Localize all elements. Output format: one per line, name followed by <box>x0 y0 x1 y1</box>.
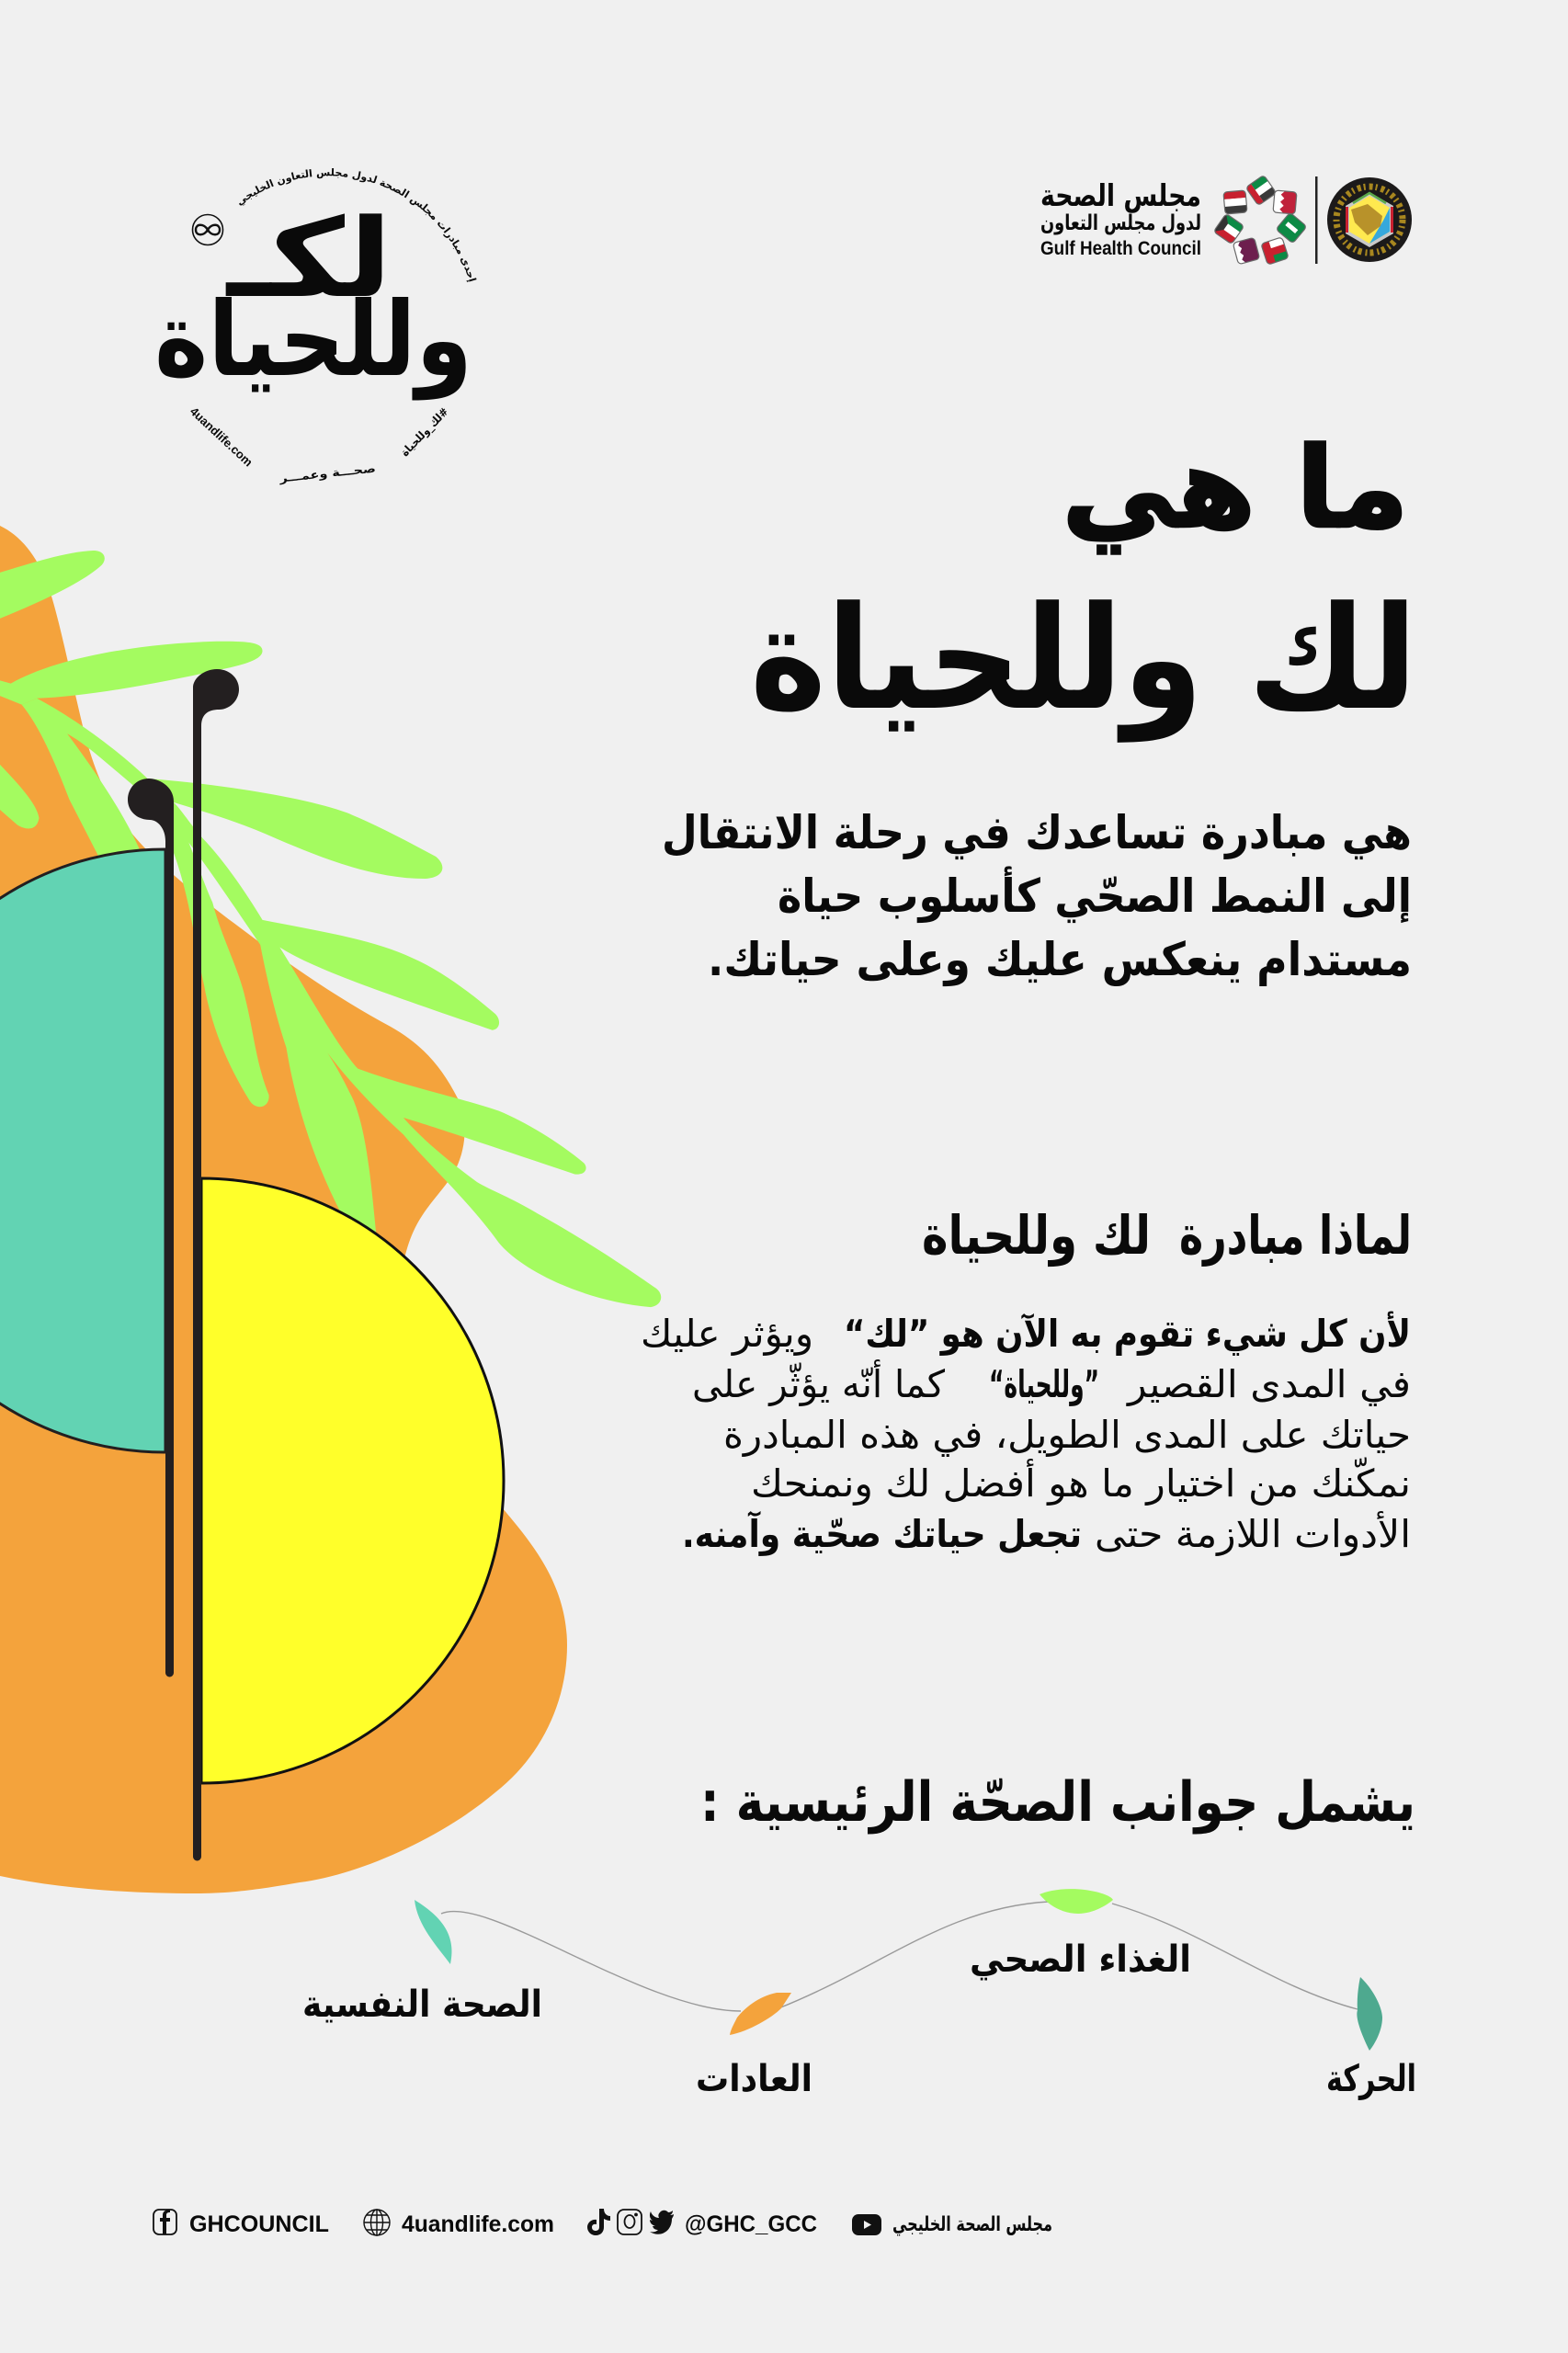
intro paragraph: مستدام ينعكس عليك وعلى حياتك. <box>708 933 1412 987</box>
why paragraph: في المدى القصير <box>1126 1362 1411 1407</box>
illustration: plant, blobs and half circles <box>0 526 661 1893</box>
infinity badge <box>193 215 222 244</box>
logo word: lak: لكـ <box>225 195 392 322</box>
tall stem with head <box>193 669 239 1860</box>
icon: twitter <box>650 2211 674 2234</box>
hashtag: #لك_وللحياة <box>398 405 451 460</box>
why paragraph: ”وللحياة“ <box>989 1362 1099 1407</box>
label: ghcouncil: GHCOUNCIL <box>189 2211 329 2237</box>
intro paragraph: هي مبادرة تساعدك في رحلة الانتقال <box>662 806 1412 859</box>
why paragraph: كما أنّه يؤثّر على <box>692 1359 945 1406</box>
icon: globe <box>364 2210 390 2235</box>
flags ring <box>1213 175 1307 265</box>
connecting curve <box>441 1902 1358 2011</box>
campaign logo: circular badge <box>154 168 476 486</box>
title line one: ما هي <box>1062 423 1409 554</box>
why heading: لماذا مبادرة <box>1179 1204 1412 1267</box>
council name: مجلس الصحة <box>1040 177 1201 213</box>
circular caption: إحدى مبادرات مجلس الصحة لدول مجلس التعاون الخليجي <box>239 168 476 283</box>
why paragraph: الأدوات اللازمة حتى <box>1095 1510 1411 1556</box>
why paragraph <box>641 1310 1411 1557</box>
council name: Gulf Health Council <box>1040 238 1201 259</box>
aspect: healthy food <box>970 1889 1191 1981</box>
why heading <box>922 1204 1412 1267</box>
aspect: movement <box>1326 1977 1416 2100</box>
intro paragraph: إلى النمط الصحّي كأسلوب حياة <box>778 866 1412 924</box>
label: website: 4uandlife.com <box>402 2211 554 2237</box>
url: 4uandlife.com <box>187 404 256 469</box>
intro paragraph <box>662 806 1412 987</box>
GCC emblem <box>1327 177 1412 262</box>
aspect: habits <box>696 1993 812 2100</box>
title line two: campaign name: لك وللحياة <box>750 575 1417 744</box>
aspects heading: يشمل جوانب الصحّة الرئيسية : <box>700 1770 1415 1835</box>
plant leaves <box>0 551 661 1307</box>
why paragraph: لأن كل شيء تقوم به الآن هو ”لك“ <box>844 1310 1411 1357</box>
icon: facebook <box>153 2210 176 2234</box>
tagline: صحـــة وعمـــر <box>278 462 377 486</box>
short stem with head <box>128 779 174 1677</box>
council name <box>1040 177 1201 259</box>
icon: instagram <box>618 2210 642 2234</box>
yellow half circle <box>201 1178 504 1783</box>
aspect: movement: الحركة <box>1326 2058 1416 2100</box>
label: youtube channel: مجلس الصحة الخليجي <box>892 2213 1052 2236</box>
icon: tiktok <box>587 2209 610 2235</box>
health aspects path <box>302 1889 1416 2100</box>
aspect: mental health <box>302 1900 542 2026</box>
divider line <box>1315 176 1318 264</box>
why paragraph: حياتك على المدى الطويل، في هذه المبادرة <box>723 1413 1411 1458</box>
logo word: walilhayah: وللحياة <box>154 280 472 401</box>
icon: youtube <box>852 2214 881 2235</box>
why heading: لك وللحياة <box>922 1204 1151 1267</box>
why paragraph: نمكّنك من اختيار ما هو أفضل لك ونمنحك <box>751 1457 1411 1506</box>
aspect: habits: العادات <box>696 2058 812 2100</box>
aspect: mental health: الصحة النفسية <box>302 1984 542 2026</box>
teal half circle <box>0 849 165 1452</box>
why paragraph: ويؤثر عليك <box>641 1312 813 1356</box>
aspect: healthy food: الغذاء الصحي <box>970 1938 1191 1981</box>
council logo <box>1040 175 1412 265</box>
main title <box>750 423 1417 744</box>
footer social links <box>153 2209 1052 2237</box>
orange blob <box>0 526 567 1893</box>
label: handle: @GHC_GCC <box>685 2211 817 2237</box>
council name: لدول مجلس التعاون <box>1040 211 1201 235</box>
why paragraph: تجعل حياتك صحّية وآمنه. <box>682 1511 1082 1557</box>
